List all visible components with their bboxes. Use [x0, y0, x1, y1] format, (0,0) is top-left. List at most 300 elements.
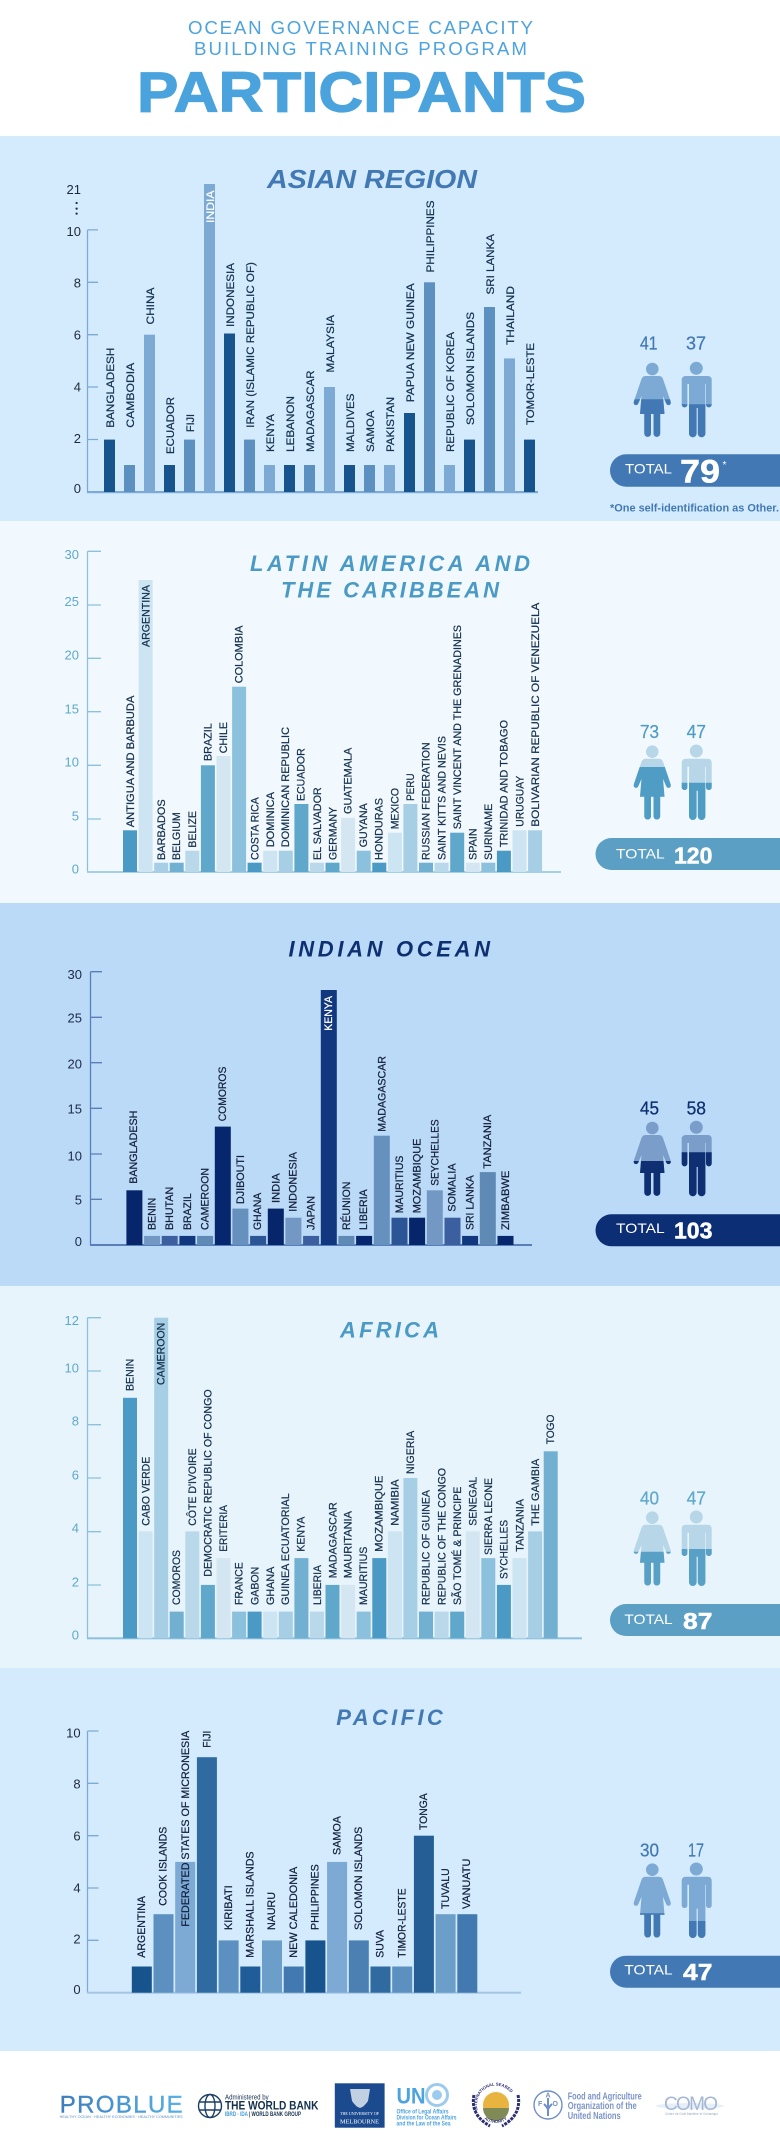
bar: Japan [303, 1196, 319, 1245]
bar: Mauritania [341, 1510, 355, 1638]
y axis [66, 1725, 521, 1997]
bar: Sri Lanka [484, 233, 497, 492]
bar: Eriteria: ERITERIA [218, 1504, 230, 1552]
bar: Argentina [139, 580, 153, 872]
bar: Kenya [321, 990, 337, 1245]
logo: International Seabed Authority: AUTHORITY [484, 2117, 506, 2123]
bar: Guyana: GUYANA [358, 803, 370, 847]
icon: man [682, 744, 712, 820]
bar: Senegal [466, 1477, 480, 1638]
bar: Guatemala [341, 747, 355, 872]
y axis: 6 [74, 328, 81, 343]
icon: man [682, 1510, 712, 1586]
bar: Somalia: SOMALIA [447, 1163, 459, 1212]
bar: Belize [185, 811, 199, 872]
bar: Germany: GERMANY [327, 806, 339, 860]
bar: Cabo Verde [139, 1457, 153, 1638]
bar chart: Indian Ocean [68, 967, 532, 1249]
bar: Guyana [357, 803, 371, 872]
title line: program name: BUILDING TRAINING PROGRAM [194, 38, 527, 59]
heading: Africa: AFRICA [339, 1317, 439, 1342]
bar: Djibouti [232, 1155, 248, 1245]
y axis: 6 [72, 1467, 79, 1482]
bar: Ghana [263, 1566, 277, 1638]
bar: Liberia: LIBERIA [312, 1564, 324, 1605]
total pill: 103: 103 [674, 1218, 712, 1244]
bar: Timor-Leste: TIMOR-LESTE [396, 1888, 408, 1958]
bar: Tomor-Leste [524, 343, 537, 492]
bar: Japan: JAPAN [305, 1196, 317, 1230]
bar: Benin [123, 1359, 137, 1638]
gender counts: 73 women, 47 men [634, 722, 712, 820]
y axis: 8 [73, 1776, 81, 1791]
bar: Togo: TOGO [545, 1414, 557, 1444]
y axis: 25 [65, 594, 79, 609]
bar: Namibia: NAMIBIA [390, 1479, 402, 1526]
logo: University of Melbourne: MELBOURNE [340, 2118, 379, 2126]
bar: Papua New Guinea [404, 283, 417, 492]
y axis: 20 [68, 1056, 82, 1071]
bar: Samoa [327, 1815, 347, 1993]
bar: Kenya: KENYA [265, 413, 277, 452]
bars and country labels [126, 990, 514, 1245]
bar: Réunion: RÉUNION [340, 1182, 353, 1230]
bar: Kenya: KENYA [323, 995, 335, 1031]
y axis: 2 [73, 1932, 81, 1947]
y axis: 8 [74, 275, 81, 290]
y axis: 0 [75, 1234, 82, 1249]
bar: Guinea Ecuatorial: GUINEA ECUATORIAL [280, 1493, 292, 1605]
bar: Spain: SPAIN [468, 828, 480, 860]
total pill: 87: 87 [683, 1608, 712, 1634]
bar: Republic of Korea [444, 331, 457, 492]
gender counts: 40 women, 47 men [634, 1488, 712, 1586]
bar: France [232, 1562, 246, 1638]
y axis: 2 [72, 1574, 79, 1589]
logo: UN Office of Legal Affairs: UN [396, 2083, 426, 2108]
heading: Asian region: ASIAN REGION [266, 164, 478, 194]
bar: Democratic Republic of Congo: DEMOCRATIC REPUBLIC OF CONGO [202, 1389, 214, 1577]
logo: FAO: O [552, 2101, 558, 2108]
bar: Maldives: MALDIVES [345, 394, 357, 452]
bar: Federated States of Micronesia: FEDERATED STATES OF MICRONESIA [180, 1730, 192, 1927]
heading: Pacific: PACIFIC [336, 1705, 444, 1730]
bar: Madagascar [304, 370, 317, 492]
logo: FAO [534, 2091, 642, 2122]
bar: Cook Islands: COOK ISLANDS [158, 1827, 170, 1906]
bars and country labels [104, 184, 537, 492]
bar: Bangladesh: BANGLADESH [105, 348, 117, 428]
bar: Pakistan [384, 397, 397, 492]
logo: COMO: Centre de Droit Maritime et Océanique [665, 2112, 718, 2116]
bar: Republic of Guinea: REPUBLIC OF GUINEA [420, 1489, 432, 1605]
bar: The Gambia [528, 1458, 542, 1638]
logo: International Seabed Authority [472, 2082, 520, 2128]
y axis [68, 967, 532, 1249]
bar: Saint Vincent and the Grenadines [450, 625, 464, 872]
bar: Argentina: ARGENTINA [136, 1895, 148, 1958]
icon: woman [634, 1863, 671, 1938]
y axis: 0 [72, 861, 79, 876]
bar: Antigua and Barbuda: ANTIGUA AND BARBUDA [125, 695, 137, 827]
total pill: 79: 79 [680, 454, 720, 490]
y axis: 0 [73, 1982, 81, 1997]
bar: Ghana [250, 1192, 266, 1245]
y axis [65, 1313, 582, 1642]
y axis: 0 [72, 1627, 79, 1642]
y axis: 10 [65, 1360, 79, 1375]
bar: Senegal: SENEGAL [468, 1477, 480, 1526]
bar: Namibia [388, 1479, 402, 1638]
bar: Mozambique [409, 1139, 425, 1245]
bar: Sri Lanka: SRI LANKA [485, 233, 497, 294]
y axis: 4 [74, 380, 81, 395]
bar: Argentina [132, 1895, 152, 1993]
bar: Vanuatu [457, 1859, 477, 1993]
gender counts: 30 women, 17 men [634, 1840, 712, 1938]
bar: Zimbabwe: ZIMBABWE [500, 1171, 512, 1230]
bar: Comoros: COMOROS [171, 1550, 183, 1605]
total pill: 87: TOTAL [624, 1611, 673, 1627]
y axis: 5 [72, 808, 79, 823]
bar: Solomon Islands [464, 312, 477, 492]
total pill: 47: 47 [683, 1959, 712, 1985]
bar: Brazil: BRAZIL [182, 1193, 194, 1230]
logo: FAO: Organization of the [568, 2101, 637, 2112]
logo: FAO: United Nations [568, 2111, 621, 2122]
bar: Kenya [264, 413, 277, 492]
bar: Saint Kitts and Nevis: SAINT KITTS AND NEVIS [436, 736, 448, 860]
bar: India [268, 1173, 284, 1245]
gender counts: 41 women, 37 men: 41 [640, 334, 658, 354]
bar: Spain [466, 828, 480, 872]
bar: Bhutan [162, 1187, 178, 1245]
y axis: 10 [67, 224, 81, 239]
bar: Saint Vincent and the Grenadines: SAINT VINCENT AND THE GRENADINES [452, 625, 464, 829]
bar: Ecuador: ECUADOR [296, 748, 308, 801]
bar: Cook Islands [154, 1827, 174, 1993]
bar: Malaysia: MALAYSIA [325, 314, 337, 372]
heading: Latin America and the Caribbean: THE CARIBBEAN [281, 578, 500, 602]
bar: Lebanon [284, 396, 297, 492]
logo: International Seabed Authority: INTERNATIONAL SEABED [474, 2082, 512, 2111]
logo: COMO: COMO [664, 2094, 718, 2115]
bar: Chile: CHILE [218, 722, 230, 753]
bar: Suva [370, 1929, 390, 1993]
bar: Ecuador [294, 748, 308, 872]
y axis: 15 [65, 701, 79, 716]
bar: Tuvalu [436, 1868, 456, 1993]
bar: Fiji: FIJI [201, 1731, 213, 1748]
icon: woman [634, 745, 671, 820]
bar: Liberia [356, 1189, 372, 1245]
gender counts: 41 women, 37 men [634, 334, 712, 437]
gender counts: 73 women, 47 men: 47 [687, 722, 706, 742]
bar: Sychelles [497, 1520, 511, 1638]
y axis: 4 [72, 1521, 79, 1536]
bar: Indonesia [285, 1151, 301, 1245]
bar: Togo [544, 1414, 558, 1638]
bar: Cameroon [197, 1168, 213, 1245]
icon: woman [634, 1122, 671, 1196]
bars and country labels [123, 1318, 558, 1638]
bar: The Gambia: THE GAMBIA [530, 1458, 542, 1526]
bar: Indonesia: INDONESIA [225, 262, 237, 327]
bar: Antigua and Barbuda [123, 695, 137, 872]
y axis: 21 [67, 182, 81, 197]
bar: Eriteria [216, 1504, 230, 1638]
bar chart: Pacific [66, 1725, 521, 1997]
bar: Sychelles: SYCHELLES [498, 1520, 510, 1579]
logo: The World Bank [198, 2092, 319, 2118]
bar chart: Africa [65, 1313, 582, 1642]
panel: Indian Ocean [0, 903, 780, 1286]
bar: Vanuatu: VANUATU [461, 1859, 473, 1909]
bar: Thailand [504, 286, 517, 492]
bar: São Tomé & Principe: SÃO TOMÉ & PRINCIPE [451, 1487, 464, 1605]
gender counts: 30 women, 17 men: 30 [640, 1840, 659, 1860]
logo: FAO: F [538, 2101, 543, 2108]
icon: woman [634, 363, 671, 437]
bar: Nigeria [403, 1430, 417, 1638]
bar: Comoros [170, 1550, 184, 1638]
total pill: 79: * [722, 460, 726, 471]
bar: Pakistan: PAKISTAN [385, 397, 397, 452]
bar: Guatemala: GUATEMALA [343, 747, 355, 814]
heading: Latin America and the Caribbean: LATIN AMERICA AND [250, 551, 530, 576]
bar: Tomor-Leste: TOMOR-LESTE [525, 343, 537, 425]
bar: Tonga [414, 1793, 434, 1993]
y axis: 4 [73, 1880, 81, 1895]
bar: Republic of the Congo: REPUBLIC OF THE CONGO [436, 1468, 448, 1605]
logo: The World Bank: THE WORLD BANK [225, 2098, 319, 2112]
bar: Nauru: NAURU [266, 1892, 278, 1930]
bar: Suva: SUVA [375, 1929, 387, 1958]
bar: Samoa: SAMOA [365, 410, 377, 452]
logo: The World Bank: IBRD · IDA | WORLD BANK GROUP [225, 2112, 301, 2118]
y axis [67, 182, 538, 496]
logo: UN Office of Legal Affairs: and the Law of the Sea [396, 2122, 451, 2128]
bar: Mauritius: MAURITIUS [358, 1547, 370, 1605]
bar: Kenya [294, 1516, 308, 1638]
bar: Benin [144, 1198, 160, 1245]
bar: Guinea Ecuatorial [279, 1493, 293, 1638]
bar: Brazil [201, 723, 215, 872]
bar: Madagascar [326, 1502, 340, 1638]
bar: Uruguay: URUGUAY [514, 775, 526, 827]
total pill: 103: TOTAL [616, 1220, 665, 1236]
bar: Comoros [215, 1067, 231, 1245]
bar: Bangladesh [104, 348, 117, 492]
bar: Cambodia [124, 362, 137, 492]
icon: woman [634, 1511, 671, 1586]
bar: Ecuador: ECUADOR [165, 397, 177, 454]
gender counts: 41 women, 37 men: 37 [686, 334, 706, 354]
logo: UN Office of Legal Affairs: Office of Legal Affairs [396, 2110, 449, 2116]
bar: Colombia: COLOMBIA [234, 625, 246, 683]
logo: PROBLUE: PROBLUE [60, 2091, 183, 2118]
logo: FAO: A [546, 2092, 551, 2100]
bar: Sri Lanka: SRI LANKA [465, 1175, 477, 1230]
icon: man [682, 1862, 712, 1938]
bar: Seychelles: SEYCHELLES [429, 1119, 441, 1186]
bar: Dominican Republic: DOMINICAN REPUBLIC [280, 727, 292, 847]
y axis [65, 547, 561, 876]
bar: Mauritius [392, 1156, 408, 1245]
bar: India: INDIA [205, 190, 217, 223]
gender counts: 45 women, 58 men: 45 [640, 1098, 659, 1118]
bar: São Tomé & Principe [450, 1487, 464, 1638]
bar: Cameroon: CAMEROON [156, 1323, 168, 1385]
bar: Belgium [170, 812, 184, 872]
bar: Sierra Leone: SIERRA LEONE [483, 1478, 495, 1555]
bar: Solomon Islands: SOLOMON ISLANDS [353, 1827, 365, 1930]
bar: Cameroon: CAMEROON [200, 1168, 212, 1230]
icon: man [682, 362, 712, 437]
bar: Cameroon [154, 1318, 168, 1638]
bar: Ecuador [164, 397, 177, 492]
bar: Cambodia: CAMBODIA [125, 362, 137, 428]
bar: Malaysia [324, 314, 337, 492]
bar: Tanzania [480, 1114, 496, 1245]
panel: Latin America and the Caribbean [0, 521, 780, 903]
header title block [137, 17, 586, 124]
heading: Latin America and the Caribbean [250, 551, 530, 602]
logo: UN Office of Legal Affairs [396, 2083, 457, 2128]
bar: Liberia: LIBERIA [358, 1189, 370, 1230]
bar: Peru: PERU [405, 773, 417, 801]
bar: Costa Rica [248, 797, 262, 872]
bar: Bangladesh [126, 1111, 142, 1245]
bar: Samoa: SAMOA [331, 1815, 343, 1855]
total pill: 79 [610, 454, 780, 490]
y axis: 30 [68, 967, 82, 982]
y axis: 2 [74, 431, 81, 446]
gender counts: 40 women, 47 men: 40 [640, 1488, 659, 1508]
bar: Bolivarian Republic of Venezuela [528, 602, 542, 872]
bar: Honduras: HONDURAS [374, 798, 386, 860]
y axis: 6 [73, 1829, 81, 1844]
bar: Suriname [481, 804, 495, 872]
bar: Mexico: MEXICO [390, 788, 402, 829]
logo: PROBLUE: HEALTHY OCEAN · HEALTHY ECONOMIES · HEALTHY COMMUNITIES [60, 2115, 183, 2119]
bar: Iran [244, 262, 257, 492]
bar: Tanzania: TANZANIA [482, 1114, 494, 1169]
bar: Bhutan: BHUTAN [164, 1187, 176, 1230]
total pill: 87 [610, 1604, 780, 1636]
bar: Lebanon: LEBANON [285, 396, 297, 452]
bar: Djibouti: DJIBOUTI [235, 1155, 247, 1204]
bar: China: CHINA [145, 287, 157, 324]
bar: China [144, 287, 157, 492]
bar: Fiji [197, 1731, 217, 1993]
title line: program name [188, 17, 534, 59]
title: participants: PARTICIPANTS [137, 60, 586, 124]
bar: Tanzania: TANZANIA [514, 1498, 526, 1552]
bar: Mauritania: MAURITANIA [343, 1510, 355, 1578]
panel: Pacific [0, 1668, 780, 2051]
bar: Philippines: PHILIPPINES [309, 1864, 321, 1930]
total pill: 120: 120 [674, 842, 712, 868]
bars and country labels [123, 580, 542, 872]
y axis: 15 [68, 1101, 82, 1116]
bar: Solomon Islands [349, 1827, 369, 1993]
y axis: 25 [68, 1011, 82, 1026]
bar: Thailand: THAILAND [505, 286, 517, 345]
logo: FAO: Food and Agriculture [568, 2092, 642, 2103]
panel: Asian region [0, 136, 780, 521]
title line: program name: OCEAN GOVERNANCE CAPACITY [188, 17, 534, 38]
y axis: 0 [74, 481, 81, 496]
y axis: 12 [65, 1313, 79, 1328]
bar: Dominica [263, 791, 277, 872]
bar: Madagascar: MADAGASCAR [327, 1502, 339, 1578]
bar: El Salvador: EL SALVADOR [312, 787, 324, 860]
bar: Iran: IRAN (ISLAMIC REPUBLIC OF) [245, 262, 257, 428]
bar: Colombia [232, 625, 246, 872]
bar: Belgium: BELGIUM [171, 812, 183, 860]
bar: Fiji [184, 414, 197, 492]
gender counts: 30 women, 17 men: 17 [688, 1840, 704, 1860]
bar: Liberia [310, 1564, 324, 1638]
bar chart: Asian region [67, 182, 538, 496]
y axis: 30 [65, 547, 79, 562]
bar: Tuvalu: TUVALU [440, 1868, 452, 1909]
gender counts: 40 women, 47 men: 47 [687, 1488, 706, 1508]
bar: Barbados: BARBADOS [156, 799, 168, 860]
bar: Kenya: KENYA [296, 1516, 308, 1552]
bar: Madagascar: MADAGASCAR [377, 1056, 389, 1132]
bar chart: Latin America and the Caribbean [65, 547, 561, 876]
heading: Indian Ocean: INDIAN OCEAN [288, 937, 491, 962]
total pill: 120 [596, 838, 780, 870]
bar: India: INDIA [271, 1173, 283, 1203]
bar: Argentina: ARGENTINA [140, 584, 152, 647]
total pill: 47 [610, 1956, 780, 1988]
bar: Kiribati: KIRIBATI [223, 1885, 235, 1930]
bar: Tanzania [512, 1498, 526, 1638]
total pill: 79: TOTAL [625, 460, 672, 476]
bar: Marshall Islands: MARSHALL ISLANDS [245, 1851, 257, 1958]
logo: University of Melbourne: THE UNIVERSITY OF [340, 2112, 379, 2116]
bar: Samoa [364, 410, 377, 492]
bar: Uruguay [512, 775, 526, 872]
bar: Solomon Islands: SOLOMON ISLANDS [465, 312, 477, 425]
bar: France: FRANCE [233, 1562, 245, 1605]
bar: Chile [216, 722, 230, 872]
bar: Costa Rica: COSTA RICA [250, 797, 262, 860]
bar: Réunion [338, 1182, 354, 1245]
total pill: 120: TOTAL [616, 846, 665, 862]
bar: Dominica: DOMINICA [265, 791, 277, 847]
bar: Mozambique: MOZAMBIQUE [411, 1139, 423, 1213]
bar: Mozambique [372, 1476, 386, 1638]
bar: Brazil: BRAZIL [202, 723, 214, 761]
bar: Peru [403, 773, 417, 872]
icon: man [682, 1121, 712, 1196]
gender counts: 45 women, 58 men [634, 1098, 712, 1196]
bar: Mexico [388, 788, 402, 872]
bar: Federated States of Micronesia [175, 1730, 195, 1993]
bar: Republic of the Congo [435, 1468, 449, 1638]
bar: Papua New Guinea: PAPUA NEW GUINEA [405, 283, 417, 402]
gender counts: 45 women, 58 men: 58 [687, 1098, 706, 1118]
bar: Zimbabwe [498, 1171, 514, 1245]
bar: Benin: BENIN [147, 1198, 159, 1230]
y axis: 10 [65, 755, 79, 770]
bar: Côte d'Ivoire [185, 1448, 199, 1638]
bar: Indonesia: INDONESIA [288, 1151, 300, 1212]
